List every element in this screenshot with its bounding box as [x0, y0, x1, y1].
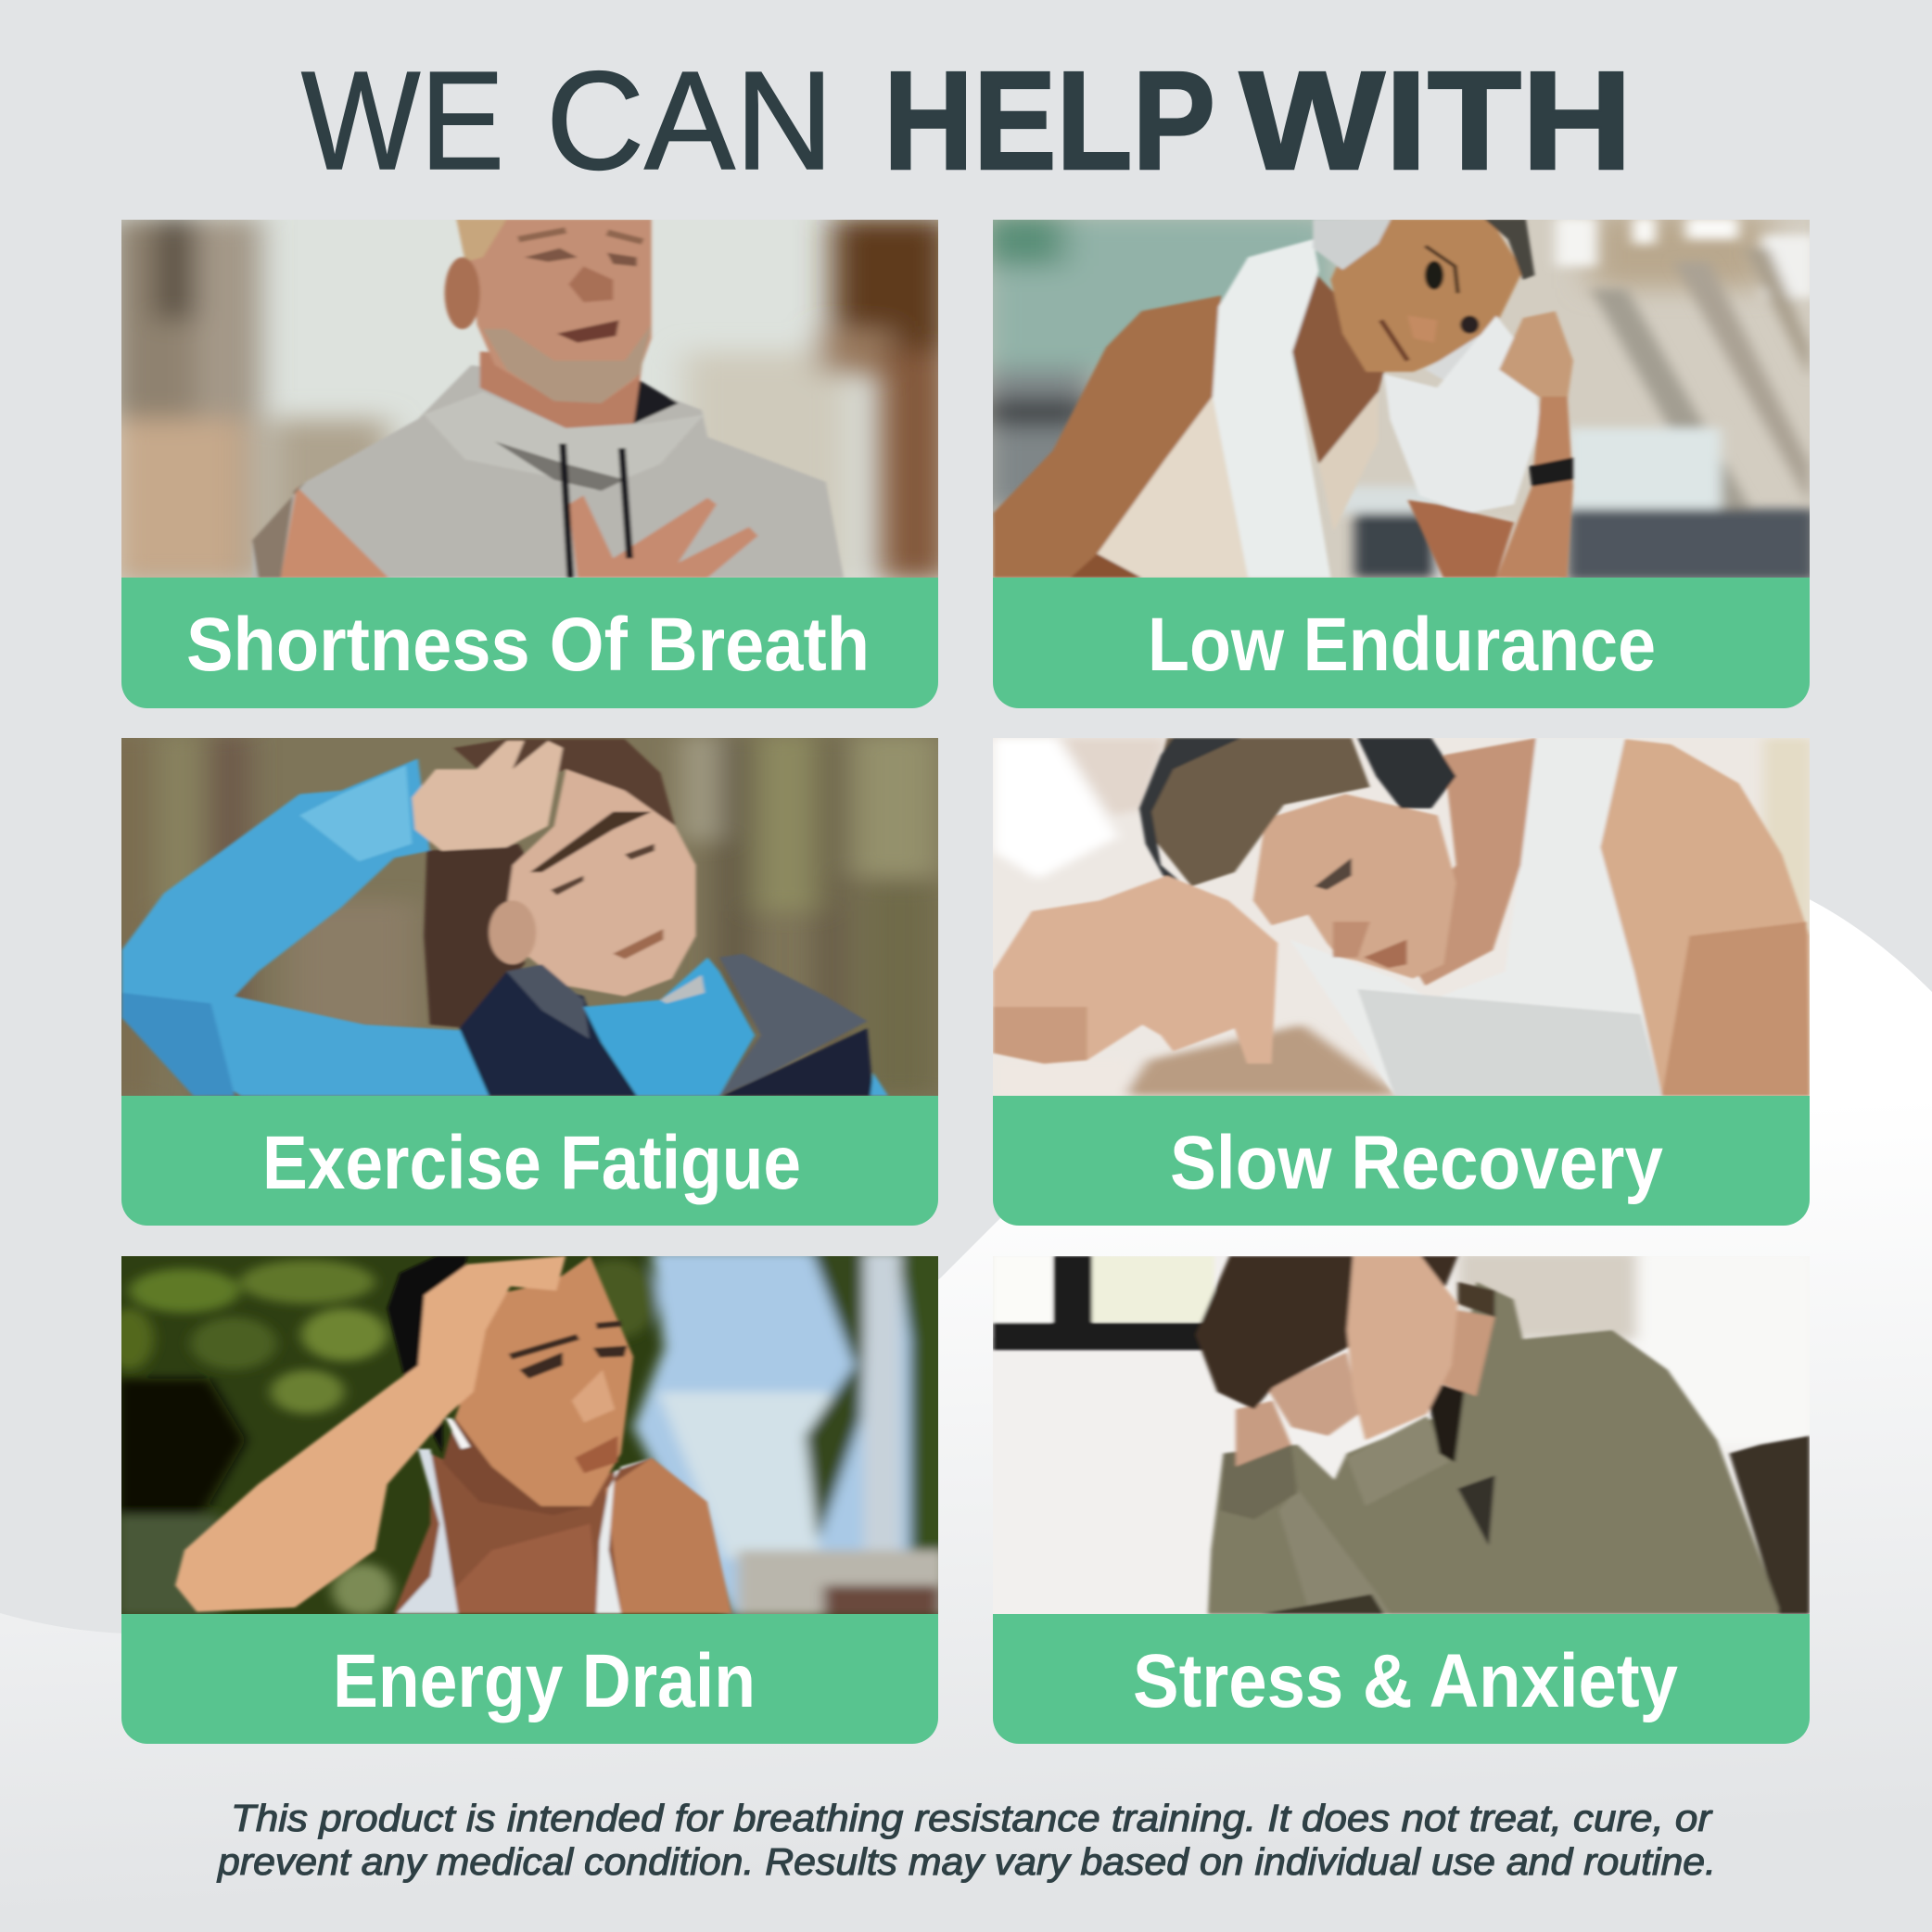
panel: shortness of breath	[110, 217, 950, 708]
label text: Exercise Fatigue	[262, 1121, 801, 1205]
label bar	[993, 578, 1810, 708]
photo: man holding head	[993, 1251, 1816, 1614]
label bar	[121, 1614, 938, 1744]
label text: Low Endurance	[1148, 603, 1656, 687]
label bar	[993, 1096, 1810, 1226]
photo: woman out of breath	[105, 1251, 947, 1616]
label bar	[121, 1096, 938, 1226]
photo: man holding chest	[110, 217, 950, 585]
disclaimer text: prevent any medical condition. Results may vary based on individual use and routine.	[216, 1840, 1716, 1883]
label text: Stress & Anxiety	[1133, 1639, 1678, 1723]
photo: woman with towel	[982, 212, 1815, 580]
label text: Shortness Of Breath	[186, 603, 870, 687]
disclaimer text: This product is intended for breathing resistance training. It does not treat, cure, or	[231, 1797, 1714, 1839]
panel: stress and anxiety	[993, 1251, 1816, 1744]
title	[301, 42, 1633, 198]
title: WITH	[1239, 42, 1633, 198]
panel: low endurance	[982, 212, 1815, 708]
disclaimer text	[216, 1797, 1716, 1883]
panel: exercise fatigue	[110, 733, 938, 1226]
label text: Slow Recovery	[1170, 1121, 1663, 1205]
photo: man resting head on arm	[993, 738, 1812, 1097]
panel: slow recovery	[993, 738, 1812, 1226]
title: WE	[301, 42, 504, 198]
label bar	[993, 1614, 1810, 1744]
title: CAN	[546, 42, 833, 198]
photo: woman wiping forehead	[110, 733, 938, 1099]
background white wave	[0, 862, 1932, 1932]
label bar	[121, 578, 938, 708]
title: HELP	[883, 42, 1215, 198]
panel: energy drain	[105, 1251, 947, 1744]
label text: Energy Drain	[333, 1639, 756, 1723]
